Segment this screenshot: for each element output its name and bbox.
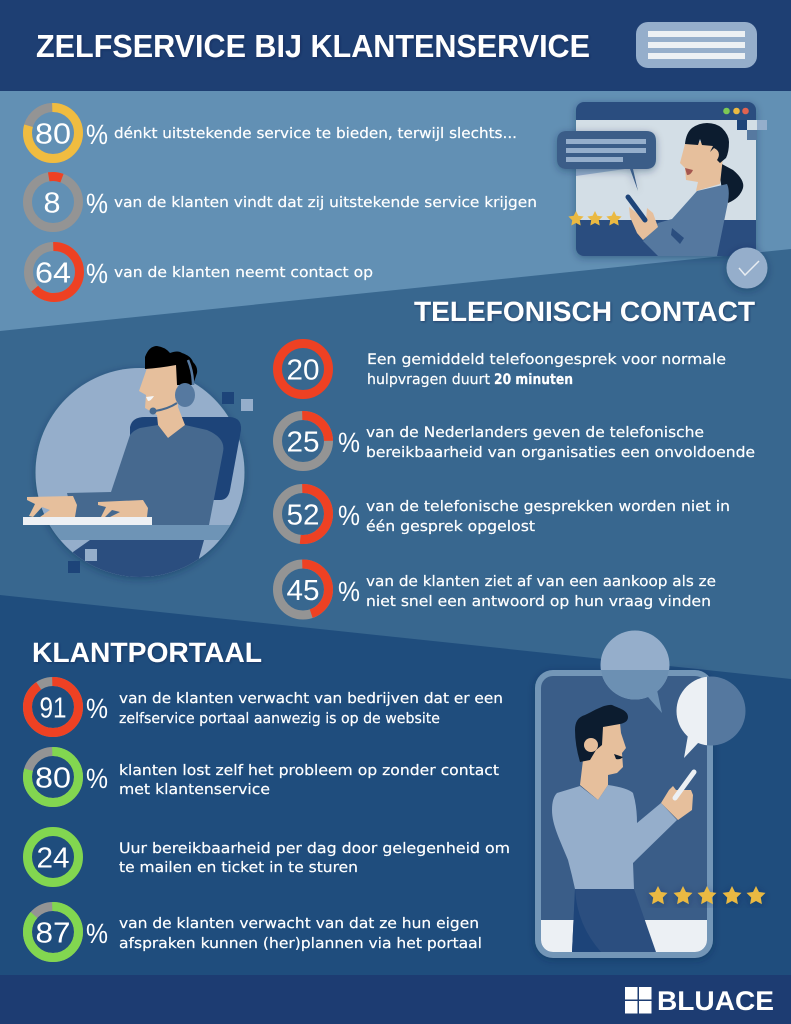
stat: 8 percent: [24, 173, 537, 231]
illustration: man with phone and chat bubbles: [535, 630, 766, 958]
stat: 25 percent: %: [338, 427, 360, 458]
stat: 25 percent: [278, 416, 755, 466]
panel: intro statistics: [24, 108, 537, 298]
stat: 20 minutes: [278, 344, 726, 394]
icon: check badge: [726, 248, 768, 288]
stat: 20 minutes: Een gemiddeld telefoongesprek voor normale: [367, 352, 726, 368]
stat: 80 percent: %: [86, 119, 108, 150]
stat: 25 percent: van de Nederlanders geven de telefonische: [366, 425, 704, 441]
stat: 45 percent: [278, 564, 716, 615]
stat: 91 percent: 91: [40, 692, 66, 724]
heading: telefonisch contact: TELEFONISCH CONTACT: [414, 296, 755, 327]
stat: 52 percent: %: [338, 500, 360, 531]
stat: 45 percent: %: [338, 576, 360, 607]
stat: 45 percent: niet snel een antwoord op hun vraag vinden: [366, 594, 711, 610]
panel: header band: [0, 0, 791, 91]
stat: 80 percent: met klantenservice: [119, 782, 270, 798]
illustration: call center agent: [23, 346, 253, 600]
stat: 20 minutes: 20 minuten: [494, 372, 573, 388]
stat: 64 percent: %: [86, 258, 108, 289]
stat: 91 percent: %: [86, 693, 108, 724]
stat: 87 percent: afspraken kunnen (her)plannen via het portaal: [119, 936, 482, 952]
stat: 20 minutes: hulpvragen duurt: [367, 372, 490, 388]
stat: 64 percent: [28, 246, 373, 298]
stat: 87 percent: [28, 906, 482, 958]
stat: 24 hours: Uur bereikbaarheid per dag door gelegenheid om: [119, 841, 510, 857]
icon: menu button: [636, 22, 757, 68]
stat: 24 hours: te mailen en ticket in te sturen: [119, 860, 358, 876]
stat: 91 percent: zelfservice portaal aanwezig is op de website: [119, 711, 440, 727]
stat: 80 percent: klanten lost zelf het probleem op zonder contact: [119, 763, 499, 779]
stat: 87 percent: %: [86, 918, 108, 949]
stat: 24 hours: [28, 832, 510, 882]
stat: 45 percent: 45: [286, 575, 320, 607]
title: ZELFSERVICE BIJ KLANTENSERVICE: [36, 28, 590, 64]
stat: 91 percent: van de klanten verwacht van bedrijven dat er een: [119, 691, 503, 707]
stat: 24 hours: 24: [36, 842, 70, 874]
heading: klantportaal: KLANTPORTAAL: [32, 637, 262, 668]
stat: 87 percent: van de klanten verwacht van dat ze hun eigen: [119, 916, 479, 932]
stat: 25 percent: 25: [286, 426, 320, 458]
illustration: woman with phone in browser window: [557, 102, 767, 256]
panel: footer band: [0, 975, 791, 1024]
stat: 80 percent: 80: [35, 118, 71, 150]
stat: 80 percent: [28, 108, 517, 158]
stat: 80 percent: 80: [35, 762, 71, 794]
stat: 80 percent: %: [86, 763, 108, 794]
stat: 8 percent: 8: [44, 188, 60, 220]
stat: 80 percent: dénkt uitstekende service te bieden, terwijl slechts...: [114, 126, 517, 142]
stat: 8 percent: van de klanten vindt dat zij uitstekende service krijgen: [114, 195, 537, 211]
stat: 64 percent: 64: [35, 258, 71, 290]
stat: 87 percent: 87: [36, 918, 70, 950]
panel: telephone statistics: [278, 344, 755, 615]
stat: 52 percent: [278, 488, 730, 540]
panel: portal statistics: [28, 682, 510, 958]
stat: 52 percent: één gesprek opgelost: [366, 519, 535, 535]
stat: 20 minutes: 20: [286, 354, 320, 386]
stat: 45 percent: van de klanten ziet af van een aankoop als ze: [366, 574, 716, 590]
stat: 52 percent: van de telefonische gesprekken worden niet in: [366, 499, 730, 515]
stat: 52 percent: 52: [286, 500, 320, 532]
logo: Bluace: BLUACE: [657, 986, 774, 1016]
stat: 25 percent: bereikbaarheid van organisaties een onvoldoende: [366, 445, 755, 461]
stat: 91 percent: [28, 682, 503, 732]
stat: 80 percent: [28, 752, 499, 802]
stat: 64 percent: van de klanten neemt contact op: [114, 265, 373, 281]
panel: section background intro: [0, 91, 791, 331]
stat: 8 percent: %: [86, 188, 108, 219]
panel: section background klantportaal: [0, 595, 791, 975]
